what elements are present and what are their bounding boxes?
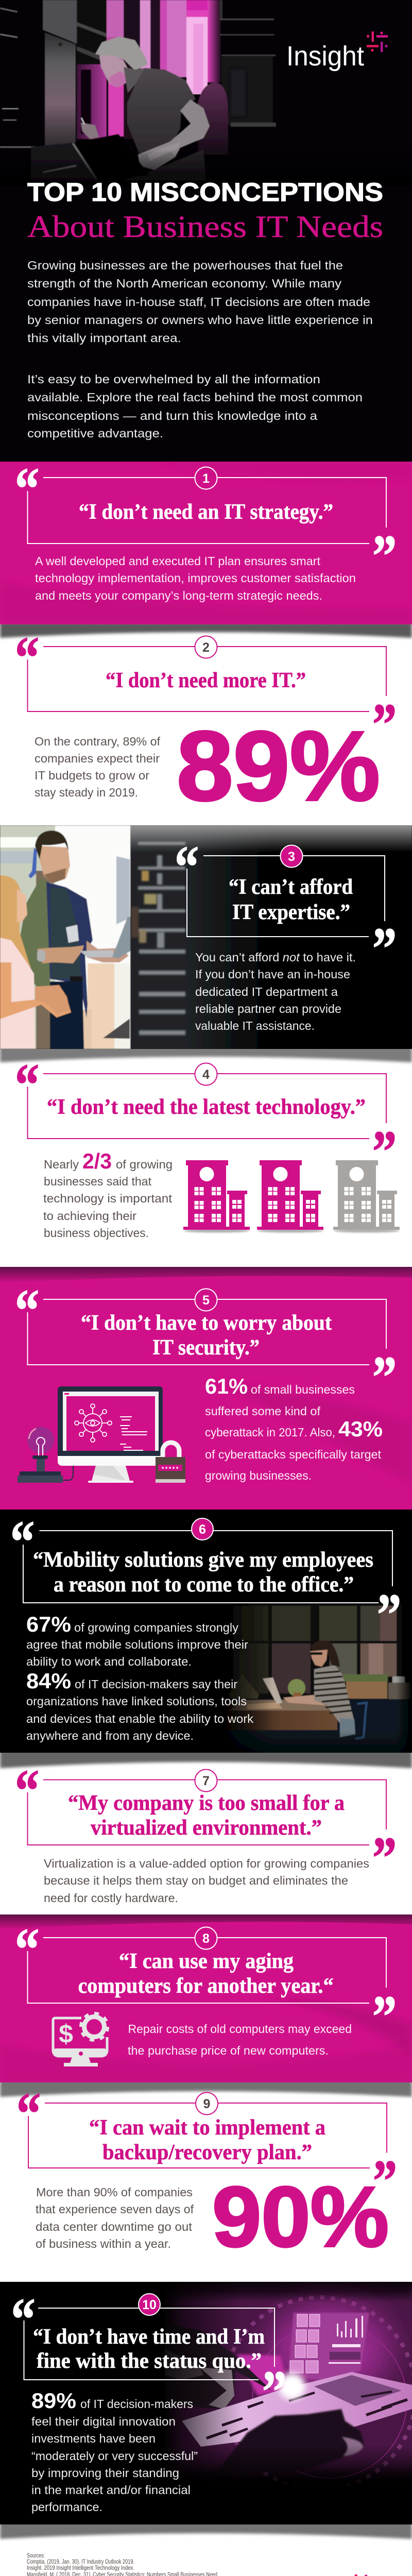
quote frame 3: 3 bbox=[288, 850, 295, 864]
heading 10: “I don’t have time and I’m bbox=[33, 2325, 265, 2349]
quote frame 4: 4 bbox=[202, 1067, 210, 1082]
logo: Insight (footer) bbox=[259, 2574, 373, 2576]
quote frame 10: “ bbox=[11, 2286, 36, 2352]
body 8: Repair costs of old computers may exceed bbox=[128, 2022, 352, 2036]
finger and hand over tablet bbox=[165, 2324, 271, 2409]
heading 10: fine with the status quo.” bbox=[37, 2349, 262, 2373]
body 5: cyberattack in 2017. Also, bbox=[205, 1426, 335, 1439]
body 1: A well developed and executed IT plan ensures smart bbox=[35, 554, 321, 568]
plasma globe bbox=[18, 1427, 73, 1483]
quote frame 5: “ bbox=[15, 1277, 39, 1343]
quote frame 10: ” bbox=[262, 2359, 286, 2425]
stat: 90%: 90% bbox=[212, 2170, 389, 2265]
quote frame 3 bbox=[176, 845, 394, 947]
body 9 bbox=[36, 2185, 194, 2250]
body 3 bbox=[195, 951, 356, 1032]
panel: misconception 3 bbox=[0, 825, 412, 1049]
body 10: 89% bbox=[31, 2388, 76, 2413]
quote frame 3: ” bbox=[372, 916, 397, 981]
quote frame 4: “ bbox=[15, 1052, 39, 1117]
body 5 bbox=[205, 1374, 383, 1482]
heading 8: “I can use my aging bbox=[119, 1950, 294, 1973]
body 2: stay steady in 2019. bbox=[35, 786, 138, 799]
holographic tower bbox=[288, 2313, 369, 2381]
icon: monitor with dollar and gear: $ bbox=[59, 2020, 73, 2048]
body 7: because it helps them stay on budget and eliminates the bbox=[44, 1874, 348, 1887]
quote frame 2 bbox=[15, 624, 397, 757]
body 6: of IT decision-makers say their bbox=[75, 1677, 237, 1691]
heading 3 bbox=[229, 875, 353, 924]
body 7: Virtualization is a value-added option for growing companies bbox=[44, 1857, 369, 1870]
title: TOP 10 MISCONCEPTIONS bbox=[27, 178, 383, 207]
quote frame 2: “ bbox=[15, 624, 39, 690]
hero photo: technician in server room bbox=[0, 0, 277, 180]
quote frame 10: 10 bbox=[142, 2298, 157, 2312]
body 7 bbox=[44, 1857, 369, 1905]
quote frame 6: 6 bbox=[199, 1522, 206, 1537]
tablet bbox=[182, 2372, 412, 2447]
heading 5: IT security.” bbox=[152, 1336, 260, 1360]
body 6: organizations have linked solutions, tools bbox=[26, 1694, 247, 1708]
sources: Comptia. (2019, Jan. 30). IT Industry Outlook 2019. bbox=[27, 2558, 134, 2565]
heading 8 bbox=[78, 1950, 334, 1998]
quote frame 7: ” bbox=[372, 1825, 397, 1891]
body 10: investments have been bbox=[31, 2432, 156, 2445]
body 10: of IT decision-makers bbox=[80, 2397, 193, 2411]
intro text: available. Explore the real facts behind the most common bbox=[27, 391, 363, 404]
title: About Business IT Needs bbox=[27, 210, 383, 244]
quote frame 9: 9 bbox=[203, 2097, 210, 2111]
intro text: strength of the North American economy. While many bbox=[27, 277, 342, 290]
body 9: More than 90% of companies bbox=[36, 2185, 193, 2199]
heading 2: “I don’t need more IT.” bbox=[106, 669, 306, 692]
body 2: On the contrary, 89% of bbox=[35, 735, 161, 748]
man's head bbox=[40, 846, 70, 883]
quote frame 1: ” bbox=[372, 523, 397, 589]
quote frame 2: ” bbox=[372, 691, 397, 757]
title bbox=[27, 182, 383, 238]
body 8 bbox=[128, 2022, 352, 2057]
heading 9: backup/recovery plan.” bbox=[102, 2141, 312, 2164]
woman bbox=[0, 875, 31, 969]
body 6: anywhere and from any device. bbox=[26, 1729, 194, 1742]
body 3: dedicated IT department a bbox=[195, 985, 338, 998]
body 1 bbox=[35, 554, 356, 602]
quote frame 7: 7 bbox=[202, 1774, 210, 1788]
quote frame 1 bbox=[16, 467, 394, 555]
body 6: of growing companies strongly bbox=[74, 1621, 238, 1634]
body 10: by improving their standing bbox=[31, 2466, 179, 2480]
heading 5: “I don’t have to worry about bbox=[81, 1311, 332, 1335]
body 9: data center downtime go out bbox=[36, 2220, 193, 2233]
body 2: companies expect their bbox=[35, 752, 160, 765]
sources bbox=[27, 2552, 217, 2576]
heading 7: “My company is too small for a bbox=[68, 1791, 345, 1815]
body 5: 61% bbox=[205, 1374, 248, 1398]
body 10: performance. bbox=[31, 2500, 102, 2514]
quote frame 5 bbox=[15, 1277, 397, 1410]
navy shirt bbox=[46, 882, 93, 1018]
heading 6: a reason not to come to the office.” bbox=[54, 1573, 354, 1597]
quote frame 4 bbox=[15, 1052, 397, 1184]
intro text: It’s easy to be overwhelmed by all the information bbox=[27, 372, 320, 386]
quote frame 10 bbox=[11, 2286, 286, 2425]
icon: building 1 bbox=[183, 1160, 250, 1232]
body 9: of business within a year. bbox=[36, 2237, 171, 2250]
body 5: suffered some kind of bbox=[205, 1404, 321, 1418]
quote frame 9 bbox=[16, 2080, 397, 2214]
body 3: If you don’t have an in-house bbox=[195, 968, 350, 981]
heading 5 bbox=[81, 1311, 332, 1360]
heading 9 bbox=[89, 2116, 325, 2164]
body 4: of growing bbox=[116, 1158, 173, 1171]
body 10 bbox=[31, 2388, 198, 2514]
shadow: below section 6 bbox=[0, 1750, 412, 1768]
heading 10 bbox=[33, 2325, 265, 2373]
sources: Insight. 2019 Insight Intelligent Technology Index. bbox=[27, 2564, 134, 2571]
quote frame 9: ” bbox=[373, 2148, 397, 2214]
heading 6 bbox=[33, 1548, 373, 1597]
body 5: of small businesses bbox=[251, 1383, 355, 1396]
body 3: You can’t afford not to have it. bbox=[195, 951, 356, 964]
sources: Sources: bbox=[27, 2552, 45, 2559]
panel: misconception 7 bbox=[15, 1757, 397, 1905]
panel: misconception 1 bbox=[0, 455, 412, 624]
quote frame 8 bbox=[15, 1916, 397, 2049]
body 4: to achieving their bbox=[43, 1209, 136, 1223]
icon: Insight mark (footer) bbox=[349, 2574, 373, 2576]
padlock bbox=[156, 1443, 185, 1483]
body 4: businesses said that bbox=[44, 1175, 152, 1188]
heading 6: “Mobility solutions give my employees bbox=[33, 1548, 373, 1572]
heading 9: “I can wait to implement a bbox=[89, 2116, 325, 2140]
heading 4: “I don’t need the latest technology.” bbox=[47, 1095, 366, 1119]
intro text bbox=[27, 259, 373, 440]
heading 3: “I can’t afford bbox=[229, 875, 353, 899]
photo: woman working on laptop by window bbox=[216, 1603, 412, 1753]
heading 8: computers for another year.“ bbox=[78, 1974, 334, 1998]
body 5: 43% bbox=[338, 1417, 383, 1441]
body 1: and meets your company’s long-term strategic needs. bbox=[35, 589, 322, 602]
body 6: and devices that enable the ability to work bbox=[26, 1712, 254, 1725]
intro text: Growing businesses are the powerhouses that fuel the bbox=[27, 259, 343, 272]
logo: Insight (hero): Insight bbox=[286, 41, 364, 72]
shadow: below section 8 bbox=[0, 2079, 412, 2097]
intro text: companies have in-house staff, IT decisions are often made bbox=[27, 295, 370, 309]
body 9: that experience seven days of bbox=[36, 2202, 194, 2216]
body 10: “moderately or very successful” bbox=[31, 2449, 198, 2463]
icon: monitor with dollar and gear bbox=[53, 2013, 108, 2066]
body 1: technology implementation, improves customer satisfaction bbox=[35, 571, 356, 585]
quote frame 8: “ bbox=[15, 1916, 39, 1982]
illustration: monitor, plasma globe and padlock bbox=[18, 1386, 185, 1483]
quote frame 1: 1 bbox=[202, 471, 210, 486]
quote frame 7: “ bbox=[15, 1757, 39, 1823]
body 4 bbox=[43, 1149, 173, 1240]
body 8: the purchase price of new computers. bbox=[128, 2044, 329, 2057]
shadow: below section 3 bbox=[0, 1046, 412, 1062]
body 6 bbox=[26, 1612, 254, 1742]
panel: misconception 2 bbox=[15, 624, 397, 821]
quote frame 6: ” bbox=[377, 1582, 401, 1648]
body 2: IT budgets to grow or bbox=[35, 769, 149, 782]
heading 7 bbox=[68, 1791, 345, 1840]
panel: hero bbox=[0, 0, 412, 462]
panel: misconception 10 bbox=[0, 2282, 412, 2524]
photo: hand on glowing holographic tablet bbox=[0, 2282, 412, 2524]
body 4: technology is important bbox=[43, 1192, 173, 1205]
body 4: 2/3 bbox=[82, 1149, 112, 1173]
quote frame 5: 5 bbox=[202, 1293, 210, 1308]
body 6: 84% bbox=[26, 1669, 71, 1693]
panel: misconception 8 bbox=[0, 1914, 412, 2082]
panel: misconception 6 bbox=[0, 1509, 412, 1753]
body 4: Nearly bbox=[44, 1158, 79, 1171]
quote frame 8: ” bbox=[372, 1984, 397, 2049]
body 6: ability to work and collaborate. bbox=[26, 1655, 192, 1668]
intro text: by senior managers or owners who have little experience in bbox=[27, 313, 373, 327]
quote frame 4: ” bbox=[372, 1118, 397, 1184]
intro text: this vitally important area. bbox=[27, 331, 181, 345]
icon: building 3 (gray) bbox=[333, 1160, 400, 1232]
quote frame 2: 2 bbox=[202, 640, 210, 655]
body 4: business objectives. bbox=[44, 1226, 149, 1240]
logo: Insight (hero) bbox=[286, 31, 388, 72]
intro text: competitive advantage. bbox=[27, 427, 163, 440]
body 10: feel their digital innovation bbox=[31, 2415, 176, 2428]
monitor bbox=[58, 1386, 163, 1483]
body 3: valuable IT assistance. bbox=[195, 1019, 315, 1032]
panel: misconception 5 bbox=[0, 1267, 412, 1510]
body 5: growing businesses. bbox=[205, 1469, 312, 1482]
green jacket bbox=[20, 879, 50, 986]
quote frame 5: ” bbox=[372, 1344, 397, 1410]
body 6: 67% bbox=[26, 1612, 71, 1636]
man's arm and laptop bbox=[37, 945, 84, 963]
body 6: agree that mobile solutions improve their bbox=[26, 1638, 248, 1651]
quote frame 8: 8 bbox=[202, 1931, 210, 1946]
body 5: of cyberattacks specifically target bbox=[205, 1448, 382, 1461]
panel: misconception 4 bbox=[15, 1052, 400, 1240]
body 10: in the market and/or financial bbox=[31, 2483, 191, 2497]
panel: misconception 9 bbox=[16, 2080, 397, 2265]
quote frame 3: “ bbox=[175, 834, 199, 900]
body 2 bbox=[35, 735, 161, 799]
icon: Insight mark bbox=[367, 31, 388, 52]
quote frame 1: “ bbox=[15, 455, 39, 521]
quote frame 7 bbox=[15, 1757, 397, 1891]
shadow: below section 10 bbox=[0, 2521, 412, 2539]
intro text: misconceptions — and turn this knowledge into a bbox=[27, 409, 317, 422]
quote frame 6 bbox=[10, 1509, 401, 1648]
heading 1: “I don’t need an IT strategy.” bbox=[79, 500, 333, 524]
icon: building 2 bbox=[257, 1160, 323, 1232]
quote frame 9: “ bbox=[16, 2080, 41, 2146]
body 7: need for costly hardware. bbox=[44, 1891, 178, 1905]
heading 7: virtualized environment.” bbox=[91, 1816, 322, 1840]
body 3: reliable partner can provide bbox=[195, 1002, 341, 1015]
shadow: below section 1 bbox=[0, 622, 412, 638]
heading 3: IT expertise.” bbox=[232, 901, 350, 924]
quote frame 6: “ bbox=[10, 1509, 35, 1574]
photo: two colleagues with laptop beside server racks bbox=[0, 825, 412, 1049]
stat: 89%: 89% bbox=[177, 710, 380, 821]
